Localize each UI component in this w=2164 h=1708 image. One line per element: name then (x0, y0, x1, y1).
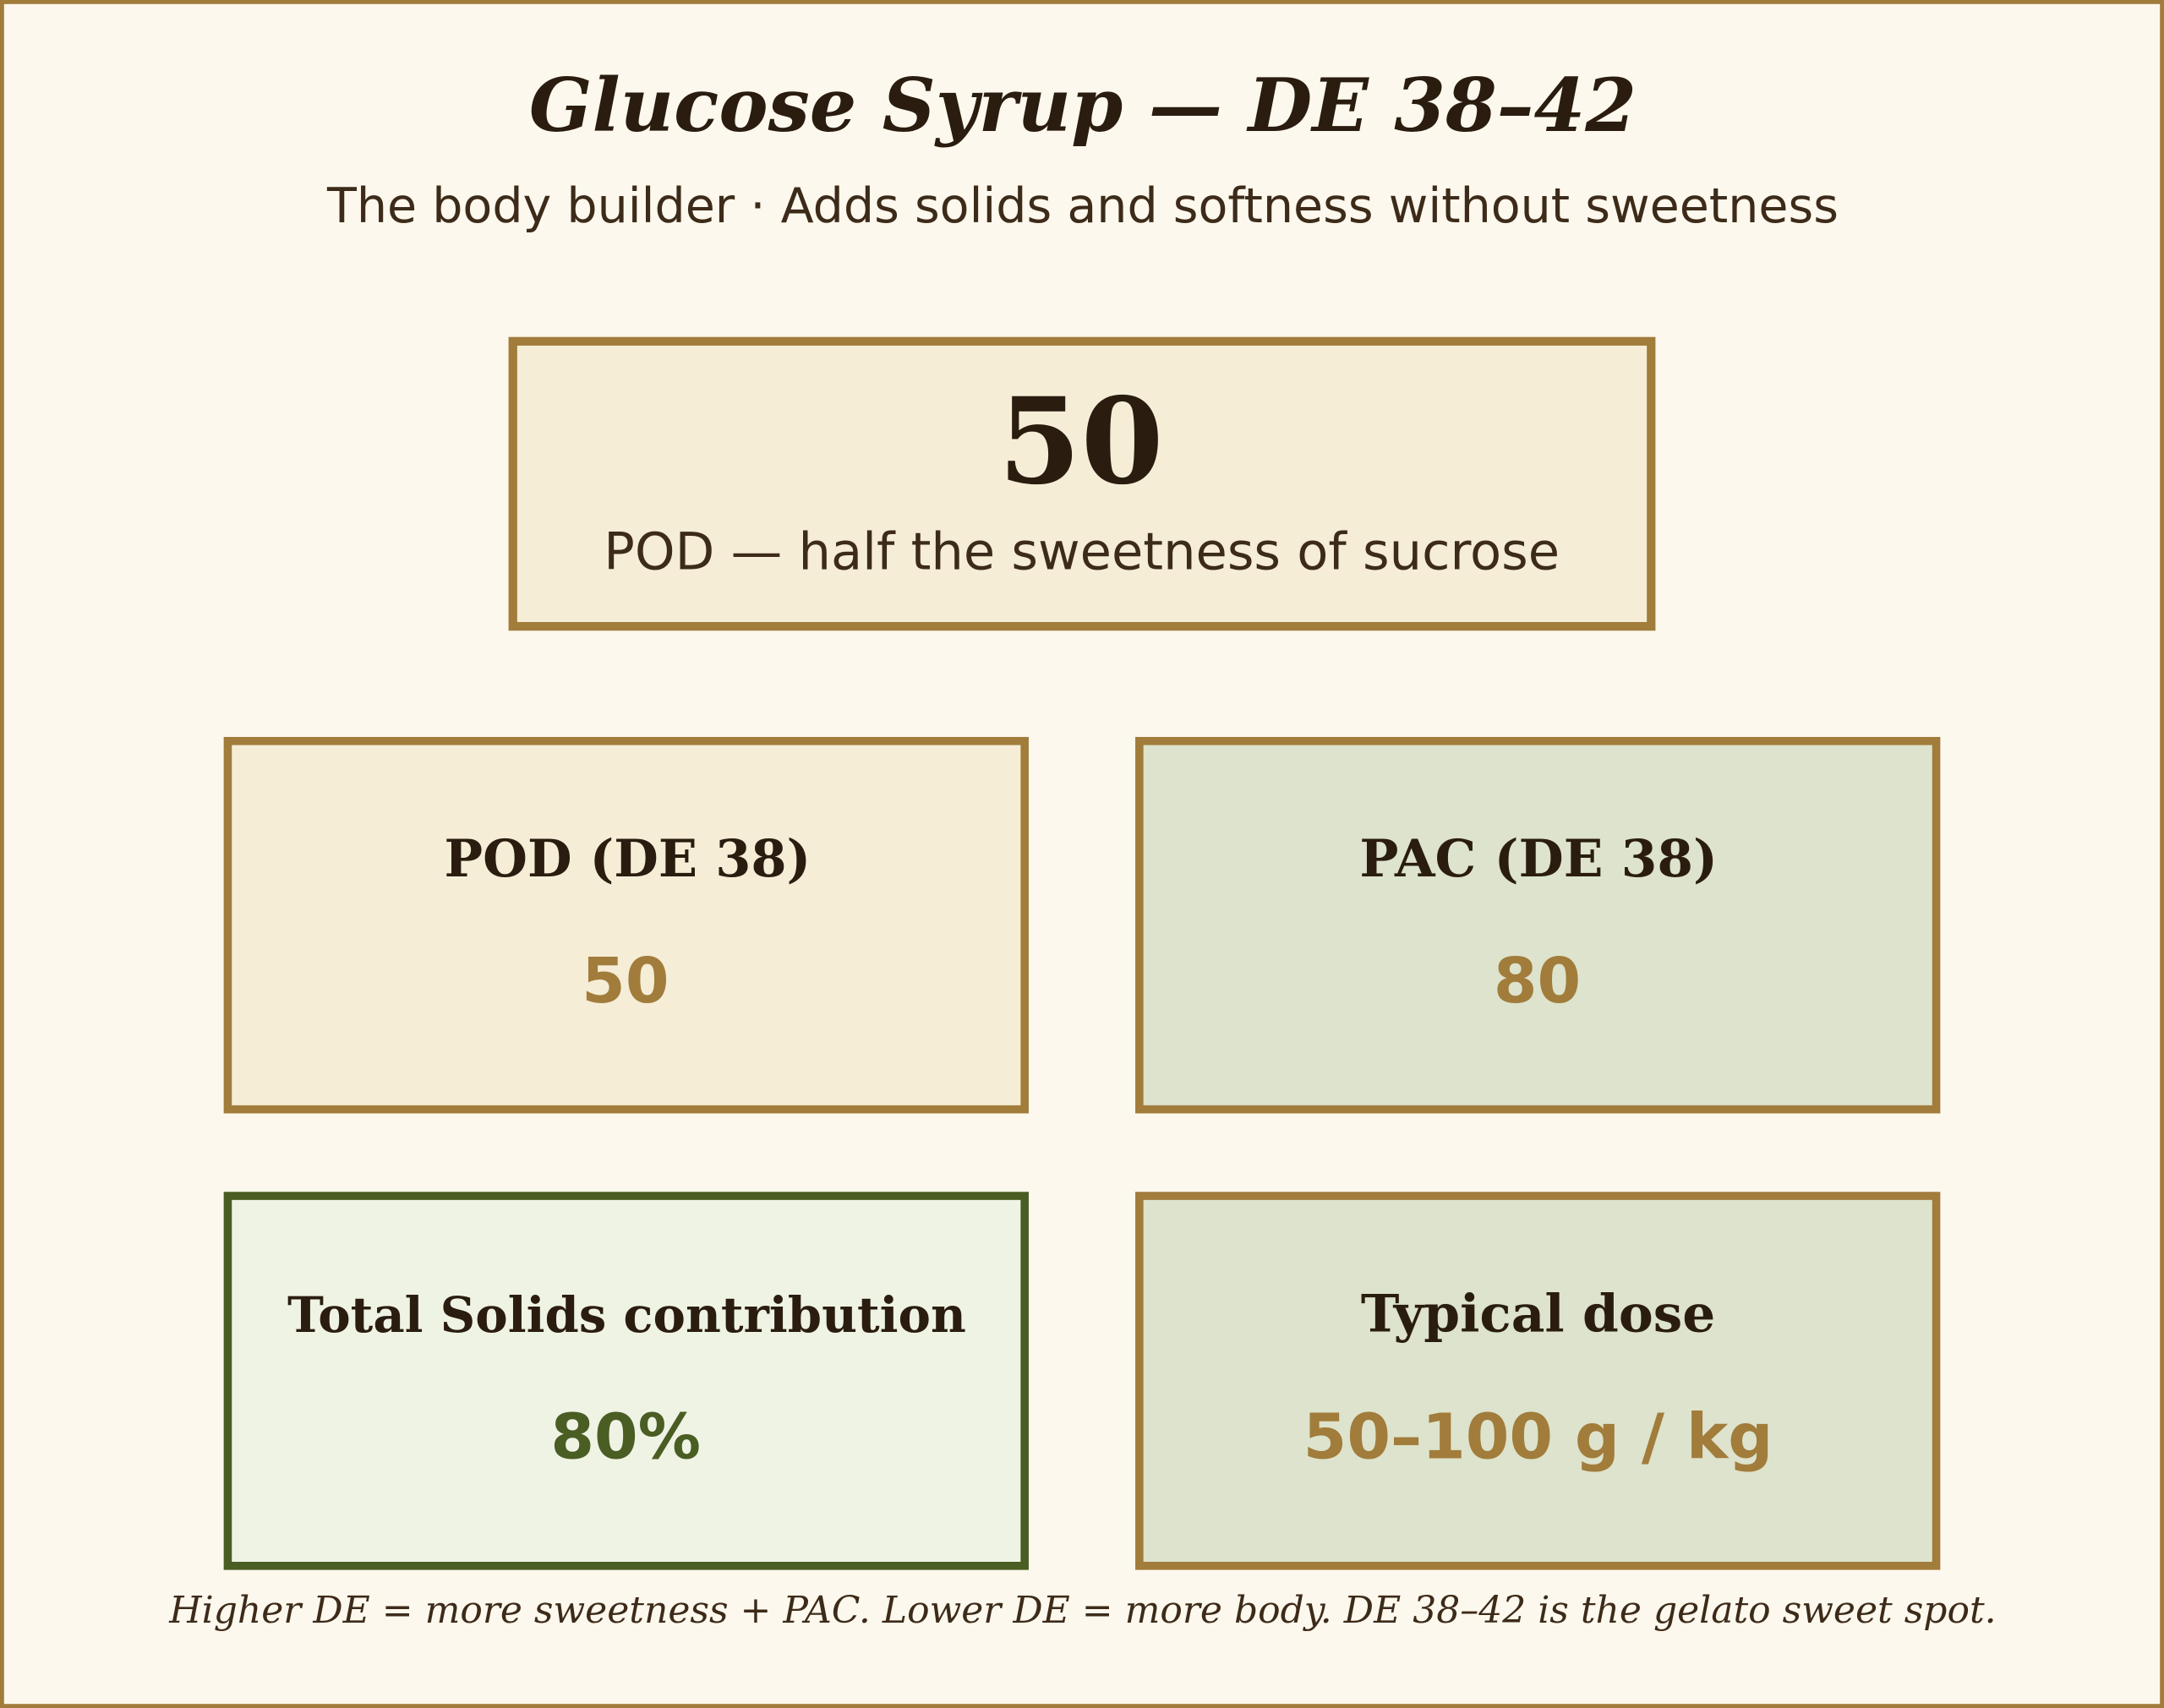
card label: POD (DE 38) (445, 829, 811, 889)
card box (227, 741, 1025, 1110)
panel: PAC (DE 38) (1139, 741, 1937, 1110)
card value: 50 (582, 944, 669, 1018)
subtitle: The body builder · Adds solids and softness without sweetness (326, 178, 1839, 234)
hero caption: POD — half the sweetness of sucrose (604, 523, 1560, 582)
panel: Total Solids contribution (227, 1196, 1025, 1566)
panel: Typical dose (1139, 1196, 1937, 1566)
hero number: 50 (998, 372, 1163, 511)
title: Glucose Syrup — DE 38–42 (529, 62, 1637, 149)
card label: PAC (DE 38) (1359, 828, 1718, 889)
panel: hero POD value (513, 341, 1651, 626)
card box (1139, 741, 1937, 1110)
card box (1139, 1196, 1937, 1566)
card label: Typical dose (1361, 1283, 1715, 1344)
footnote: Higher DE = more sweetness + PAC. Lower DE = more body. DE 38–42 is the gelato sweet spot. (168, 1589, 1997, 1632)
card value: 50–100 g / kg (1303, 1400, 1773, 1473)
card box (227, 1196, 1025, 1566)
hero panel box (513, 341, 1651, 626)
card value: 80% (550, 1400, 701, 1473)
card label: Total Solids contribution (287, 1286, 966, 1344)
panel: POD (DE 38) (227, 741, 1025, 1110)
card value: 80 (1494, 944, 1581, 1018)
